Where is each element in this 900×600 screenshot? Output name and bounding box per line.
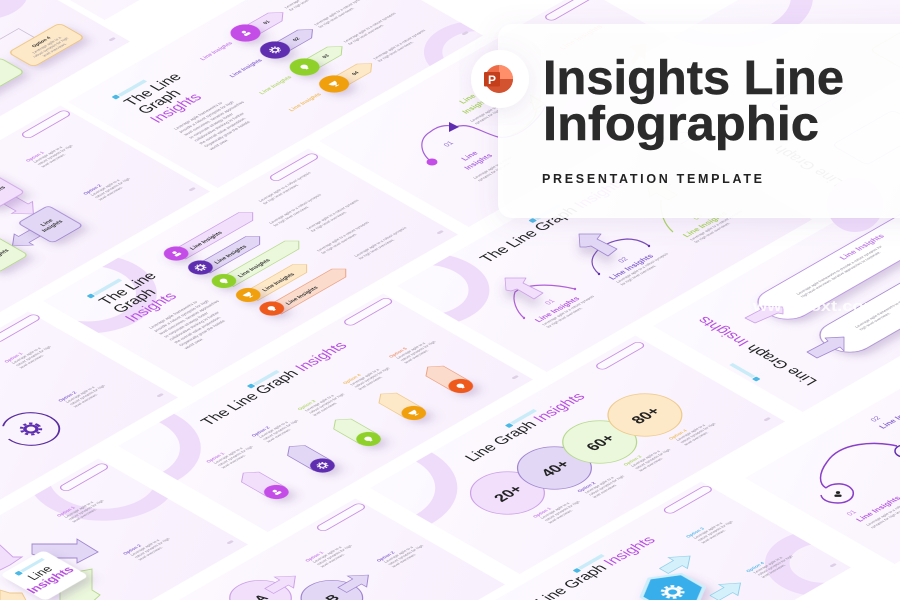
label 02: 02 (617, 257, 630, 264)
arrow 03 (636, 176, 683, 204)
slide: flowchart with options: robust synopsis for high (37, 144, 74, 166)
item 01 (190, 0, 348, 65)
option labels (532, 417, 721, 526)
bar 2 (183, 191, 334, 278)
circle 20+ (455, 463, 560, 523)
item 01: Line Insights (199, 41, 235, 61)
bar 1 (159, 169, 323, 264)
slide: A B circles: robust synopsis for high (316, 544, 353, 566)
circle B (288, 564, 392, 600)
body copy: level overviews. Iterative approaches (158, 299, 220, 335)
slide: big arrows options: Leverage agile to a (64, 501, 94, 518)
accent bar (86, 278, 122, 298)
label 01: Line Insights (533, 295, 582, 323)
option 4: robust synopsis for high (353, 367, 391, 388)
option labels: Option 2 (576, 481, 597, 493)
slide: A B circles: Leverage agile to a (312, 546, 343, 563)
slide: right ring (745, 326, 900, 564)
label 01: Leverage agile to a robust synopsis (541, 295, 595, 326)
long pill 1: Leverage agile frameworks to provide a robust synopsis for (796, 245, 883, 295)
long pill 1: Line Insights (837, 233, 886, 261)
label 03: for high level overviews. (694, 222, 731, 243)
bar 4 (231, 219, 382, 306)
option 1: Option 1 (205, 451, 226, 463)
option labels: level overviews. (638, 457, 664, 472)
slide: flowchart with options: Leverage agile to a (33, 146, 63, 163)
slide: flowchart with options (0, 106, 210, 344)
main title: Insights Line (543, 51, 844, 105)
overlapping arrow shapes bottom left (0, 539, 100, 600)
faint shapes behind title card: Line Graph (769, 143, 848, 188)
circle 40+: 40+ (537, 458, 574, 479)
item 02 (219, 0, 378, 82)
bar 2: Line Insights (214, 245, 249, 265)
label 01: for high level overviews. (546, 307, 584, 328)
item 04: for high level overviews. (377, 41, 415, 62)
bar 5: Leverage agile to a robust synopsis (354, 226, 408, 257)
option 1: level overviews. (221, 454, 247, 469)
option 5: robust synopsis for high (400, 340, 437, 362)
option labels: Leverage agile to a (630, 450, 661, 467)
accent bar (573, 554, 606, 573)
slide: A B circles: Leverage agile to a (383, 546, 414, 563)
bar 5: Line Insights (285, 286, 320, 306)
option 2 (250, 414, 358, 476)
bar 3: Line Insights (237, 258, 272, 278)
curve timeline with labels: Insights (462, 152, 495, 171)
option 5: Option 5 (388, 346, 409, 358)
body copy: to corporate strategy foster (163, 311, 210, 338)
label 02: for high level overviews. (620, 264, 657, 286)
slide: flowchart with options: Leverage agile to a (90, 179, 121, 196)
label 02: Leverage agile to a robust synopsis (615, 252, 669, 283)
slide: A B circles (90, 498, 505, 600)
arrow on pill 1 (745, 306, 783, 323)
item 01: 01 (262, 20, 272, 25)
slide: big arrows options: Option 2 (122, 543, 143, 555)
option labels: Option 3 (622, 454, 643, 466)
label 03 (672, 200, 748, 243)
long pill 2 (810, 220, 900, 358)
circle 80+ (593, 385, 697, 445)
option 4: Leverage agile to a (349, 368, 380, 386)
slide: circles 20+ to 80+ (416, 336, 784, 574)
bar 1: for high level overviews. (262, 183, 300, 205)
option labels: Leverage agile to a (540, 502, 570, 519)
slide: big arrows options: robust synopsis for high (134, 537, 171, 559)
slide: A B circles: robust synopsis for high (387, 544, 425, 566)
body copy: Leverage agile frameworks to (147, 300, 198, 329)
slide: flowchart with options: Insights (41, 219, 65, 233)
heading: Insights (146, 91, 206, 125)
body copy: the overall value proposition. (173, 315, 222, 344)
slide: ring with gear: robust synopsis for high (15, 345, 52, 367)
bar 5 (254, 224, 419, 319)
option 3: Leverage agile to a (693, 522, 723, 539)
option 1: Leverage agile to a (213, 447, 244, 464)
slide: flowchart with options: Line (40, 219, 55, 227)
body copy: world view. (183, 337, 205, 350)
slide: flowchart with options: robust synopsis for high (94, 177, 131, 199)
slide: A B circles: Option 2 (375, 550, 396, 562)
label 03: Leverage agile to a robust synopsis (689, 210, 743, 241)
slide: top left arc panel (0, 0, 130, 116)
curve timeline with labels: synopsis for high level (474, 105, 509, 125)
label 02: Line Insights (607, 253, 656, 281)
slide: big arrows options: Option 1 (56, 505, 77, 517)
right ring icon and labels: 02 (870, 416, 883, 423)
item 02: for high level overviews. (318, 7, 355, 28)
long pill 1 (748, 187, 900, 325)
slide: hexagon (535, 482, 850, 600)
faint shapes behind title card: 02 (547, 62, 562, 71)
body copy: the overall value proposition. (198, 116, 247, 145)
slide: ring with gear: level overviews. (73, 393, 99, 408)
curve lines for arrows (514, 200, 673, 319)
circle 20+: 20+ (490, 483, 527, 504)
watermark: www.25xt.com (752, 298, 880, 315)
item 04: 04 (351, 71, 361, 76)
curve timeline with labels: Line (457, 93, 478, 105)
accent bar (112, 79, 147, 100)
slide: ring with gear: Leverage agile to a (11, 347, 42, 364)
arrow on pill 2 (807, 337, 844, 358)
option 5: level overviews. (404, 349, 430, 364)
option 2: Option 2 (250, 425, 271, 437)
bar 4: Line Insights (261, 272, 297, 292)
slide: timeline top center (411, 0, 646, 226)
right ring icon and labels (820, 402, 900, 529)
slide: top center arc panel (71, 0, 138, 20)
body copy: to corporate strategy foster (188, 112, 235, 139)
slide: rotated content (653, 174, 900, 412)
curve timeline with labels (422, 43, 647, 182)
option 4: Option 4 (745, 561, 766, 573)
bar 3 (207, 197, 371, 292)
option 3: robust synopsis for high (697, 520, 734, 542)
option 4: Option 4 (342, 373, 363, 385)
option 1: robust synopsis for high (217, 445, 254, 467)
circle 60+ (547, 412, 652, 472)
option labels: robust synopsis for high (634, 448, 672, 470)
curve timeline with labels: Leverage agile to a robust (469, 99, 510, 122)
label 01 (524, 285, 600, 328)
slide: stacked Line Insights bars (78, 149, 458, 386)
heading: The Line (120, 71, 186, 108)
option labels: Leverage agile to a (675, 424, 706, 441)
slide: big arrows options (0, 459, 248, 600)
option labels: level overviews. (592, 484, 618, 499)
faint shapes behind title card (511, 20, 900, 188)
slide: ring with gear: Option 1 (3, 351, 24, 363)
option 4: level overviews. (761, 564, 787, 579)
arc below card (827, 178, 883, 232)
slide: top left arc panel: Option 4 (31, 36, 53, 49)
option 3: level overviews. (701, 529, 727, 544)
bar 3: Leverage agile to a robust synopsis (306, 199, 360, 230)
bar 2: for high level overviews. (273, 205, 310, 227)
option 4 (745, 550, 798, 580)
item 03: for high level overviews. (347, 24, 385, 45)
item 03 (249, 8, 408, 99)
rotated heading: Line Graph Insights (694, 314, 821, 387)
option labels: level overviews. (548, 509, 574, 524)
long pill 2: high level overviews. (859, 312, 892, 331)
card: Line Insights: Insights (24, 565, 77, 595)
option 3: Option 3 (685, 526, 706, 538)
bar 2: Leverage agile to a robust synopsis (268, 193, 322, 224)
right ring icon and labels: 01 (846, 510, 859, 517)
slide: big arrows options: robust synopsis for high (68, 499, 105, 521)
bar 5: for high level overviews. (358, 238, 396, 260)
slide: flowchart with options: Option 2 (82, 183, 103, 195)
body copy: Leverage agile frameworks to (172, 101, 223, 130)
bar 4: for high level overviews. (321, 233, 358, 254)
body copy: collaborative thinking to further (193, 111, 246, 142)
heading: Line Graph Insights (461, 390, 589, 464)
body copy: Organically grow the holistic (178, 319, 226, 347)
card: Line Insights: Line (24, 564, 56, 582)
circle A (217, 564, 319, 600)
slide: top left arc panel: level overviews. (42, 42, 68, 57)
slide: ring with gear: Option 2 (57, 390, 78, 402)
small arrow bottom (705, 578, 750, 600)
heading: The Line Graph Insights (476, 176, 630, 265)
slide: big arrows options: Leverage agile to a (130, 539, 160, 556)
circle 60+: 60+ (583, 432, 620, 453)
body copy: provide a robust synopsis for high (177, 100, 236, 133)
curve timeline with labels: Line (459, 150, 480, 162)
accent bar (247, 370, 280, 388)
curve timeline with labels: 01 (443, 141, 456, 148)
slide: ring with gear: Leverage agile to a (65, 386, 96, 403)
main title: Infographic (543, 97, 819, 151)
circle 40+ (502, 438, 607, 498)
title card (498, 24, 900, 218)
slide: flowchart with options: level overviews. (98, 186, 124, 201)
option labels: robust synopsis for high (544, 500, 581, 522)
item 04 (278, 25, 437, 116)
slide: flowchart with options: level overviews. (41, 153, 67, 168)
heading: Insights (121, 290, 181, 324)
body copy: world view. (208, 138, 230, 151)
option 4: Leverage agile to a (753, 556, 783, 574)
slide: ring with gear (0, 311, 179, 550)
subtitle: PRESENTATION TEMPLATE (542, 172, 762, 186)
heading: Graph (134, 87, 185, 116)
label 01: 01 (544, 299, 557, 306)
option 1 (205, 440, 313, 502)
arrow 02 (579, 234, 617, 256)
icon ring (0, 397, 87, 461)
option 3: robust synopsis for high (308, 393, 346, 414)
bar 1: Line Insights (189, 231, 224, 251)
slide: flowchart with options: Option 1 (25, 150, 46, 162)
slide: top left arc panel: robust synopsis for high (32, 37, 70, 58)
option labels: Option 4 (668, 428, 688, 440)
slide: curved arrows (433, 180, 812, 372)
slide: ring with gear: level overviews. (19, 354, 45, 369)
circle 80+: 80+ (628, 405, 665, 426)
curve timeline with labels: Leverage agile to a robust (472, 156, 513, 179)
slide: big arrows options: level overviews. (72, 508, 98, 523)
label 03: Line Insights (681, 210, 730, 238)
slide: A B circles: level overviews. (391, 553, 417, 568)
slide: The Line Graph Insights with numbered items (112, 0, 482, 188)
slide: A B circles: level overviews. (320, 553, 346, 568)
curve timeline with labels: synopsis for high level (477, 162, 512, 182)
accent bar (528, 204, 561, 223)
bar 3: for high level overviews. (310, 211, 348, 232)
heading: The Line Graph Insights (197, 339, 351, 428)
option labels: level overviews. (683, 431, 710, 446)
option 4: robust synopsis for high (757, 555, 794, 576)
icon: PowerPoint badge: P (488, 73, 496, 87)
small arrow top (654, 550, 700, 576)
option 3 (685, 515, 738, 546)
option 3: level overviews. (312, 402, 338, 417)
accent bar (505, 409, 538, 428)
option 3: Leverage agile to a (304, 394, 335, 412)
option labels: robust synopsis for high (679, 422, 717, 444)
curve timeline with labels: Insights (460, 96, 493, 115)
bar 4: Leverage agile to a robust synopsis (316, 221, 370, 252)
option labels: robust synopsis for high (588, 475, 625, 496)
slide: A B circles: Option 1 (304, 550, 325, 562)
item 03: Leverage agile to a robust synopsis (343, 12, 397, 43)
label 02 (598, 242, 674, 286)
option 2: Leverage agile to a (258, 421, 289, 438)
option 5: Leverage agile to a (396, 342, 426, 359)
arrow 01 (505, 278, 543, 299)
option 2: robust synopsis for high (262, 419, 299, 441)
heading: Graph (109, 286, 160, 315)
body copy: collaborative thinking to further (168, 310, 221, 341)
item 04: Line Insights (288, 92, 323, 112)
option 3 (296, 388, 404, 450)
slide: big arrows options: level overviews. (138, 546, 164, 561)
body copy: provide a robust synopsis for high (152, 299, 211, 332)
heading: The Line (95, 270, 161, 307)
slide: The Line Graph Insights with arrows (159, 294, 532, 532)
item 02: Line Insights (229, 58, 264, 78)
option 3: Option 3 (296, 399, 317, 411)
body copy: level overviews. Iterative approaches (183, 100, 245, 136)
label 03: 03 (692, 214, 705, 221)
option labels: Option 1 (532, 506, 553, 518)
card: Line Insights (0, 550, 89, 600)
slide: ring with gear: robust synopsis for high (69, 384, 106, 406)
long pill 1: high level overviews. Iterative approaches to corporate. (800, 251, 882, 298)
option 5 (388, 335, 496, 397)
item 03: Line Insights (259, 75, 294, 95)
item 02: 02 (292, 37, 302, 42)
slide: top right (766, 0, 900, 24)
option 4: level overviews. (357, 376, 384, 391)
option labels: Leverage agile to a (584, 476, 615, 494)
faint shapes behind title card: Line Insights (557, 23, 605, 51)
hexagon icon (629, 567, 716, 600)
item 04: Leverage agile to a robust synopsis (373, 29, 426, 60)
icon: PowerPoint badge (471, 50, 529, 108)
option 4 (342, 362, 449, 424)
body copy: Organically grow the holistic (203, 120, 251, 148)
slide: top left arc panel: Leverage agile to a (32, 36, 62, 54)
bar 1: Leverage agile to a robust synopsis (258, 171, 312, 202)
option 2: level overviews. (266, 428, 292, 443)
item 03: 03 (321, 54, 331, 59)
